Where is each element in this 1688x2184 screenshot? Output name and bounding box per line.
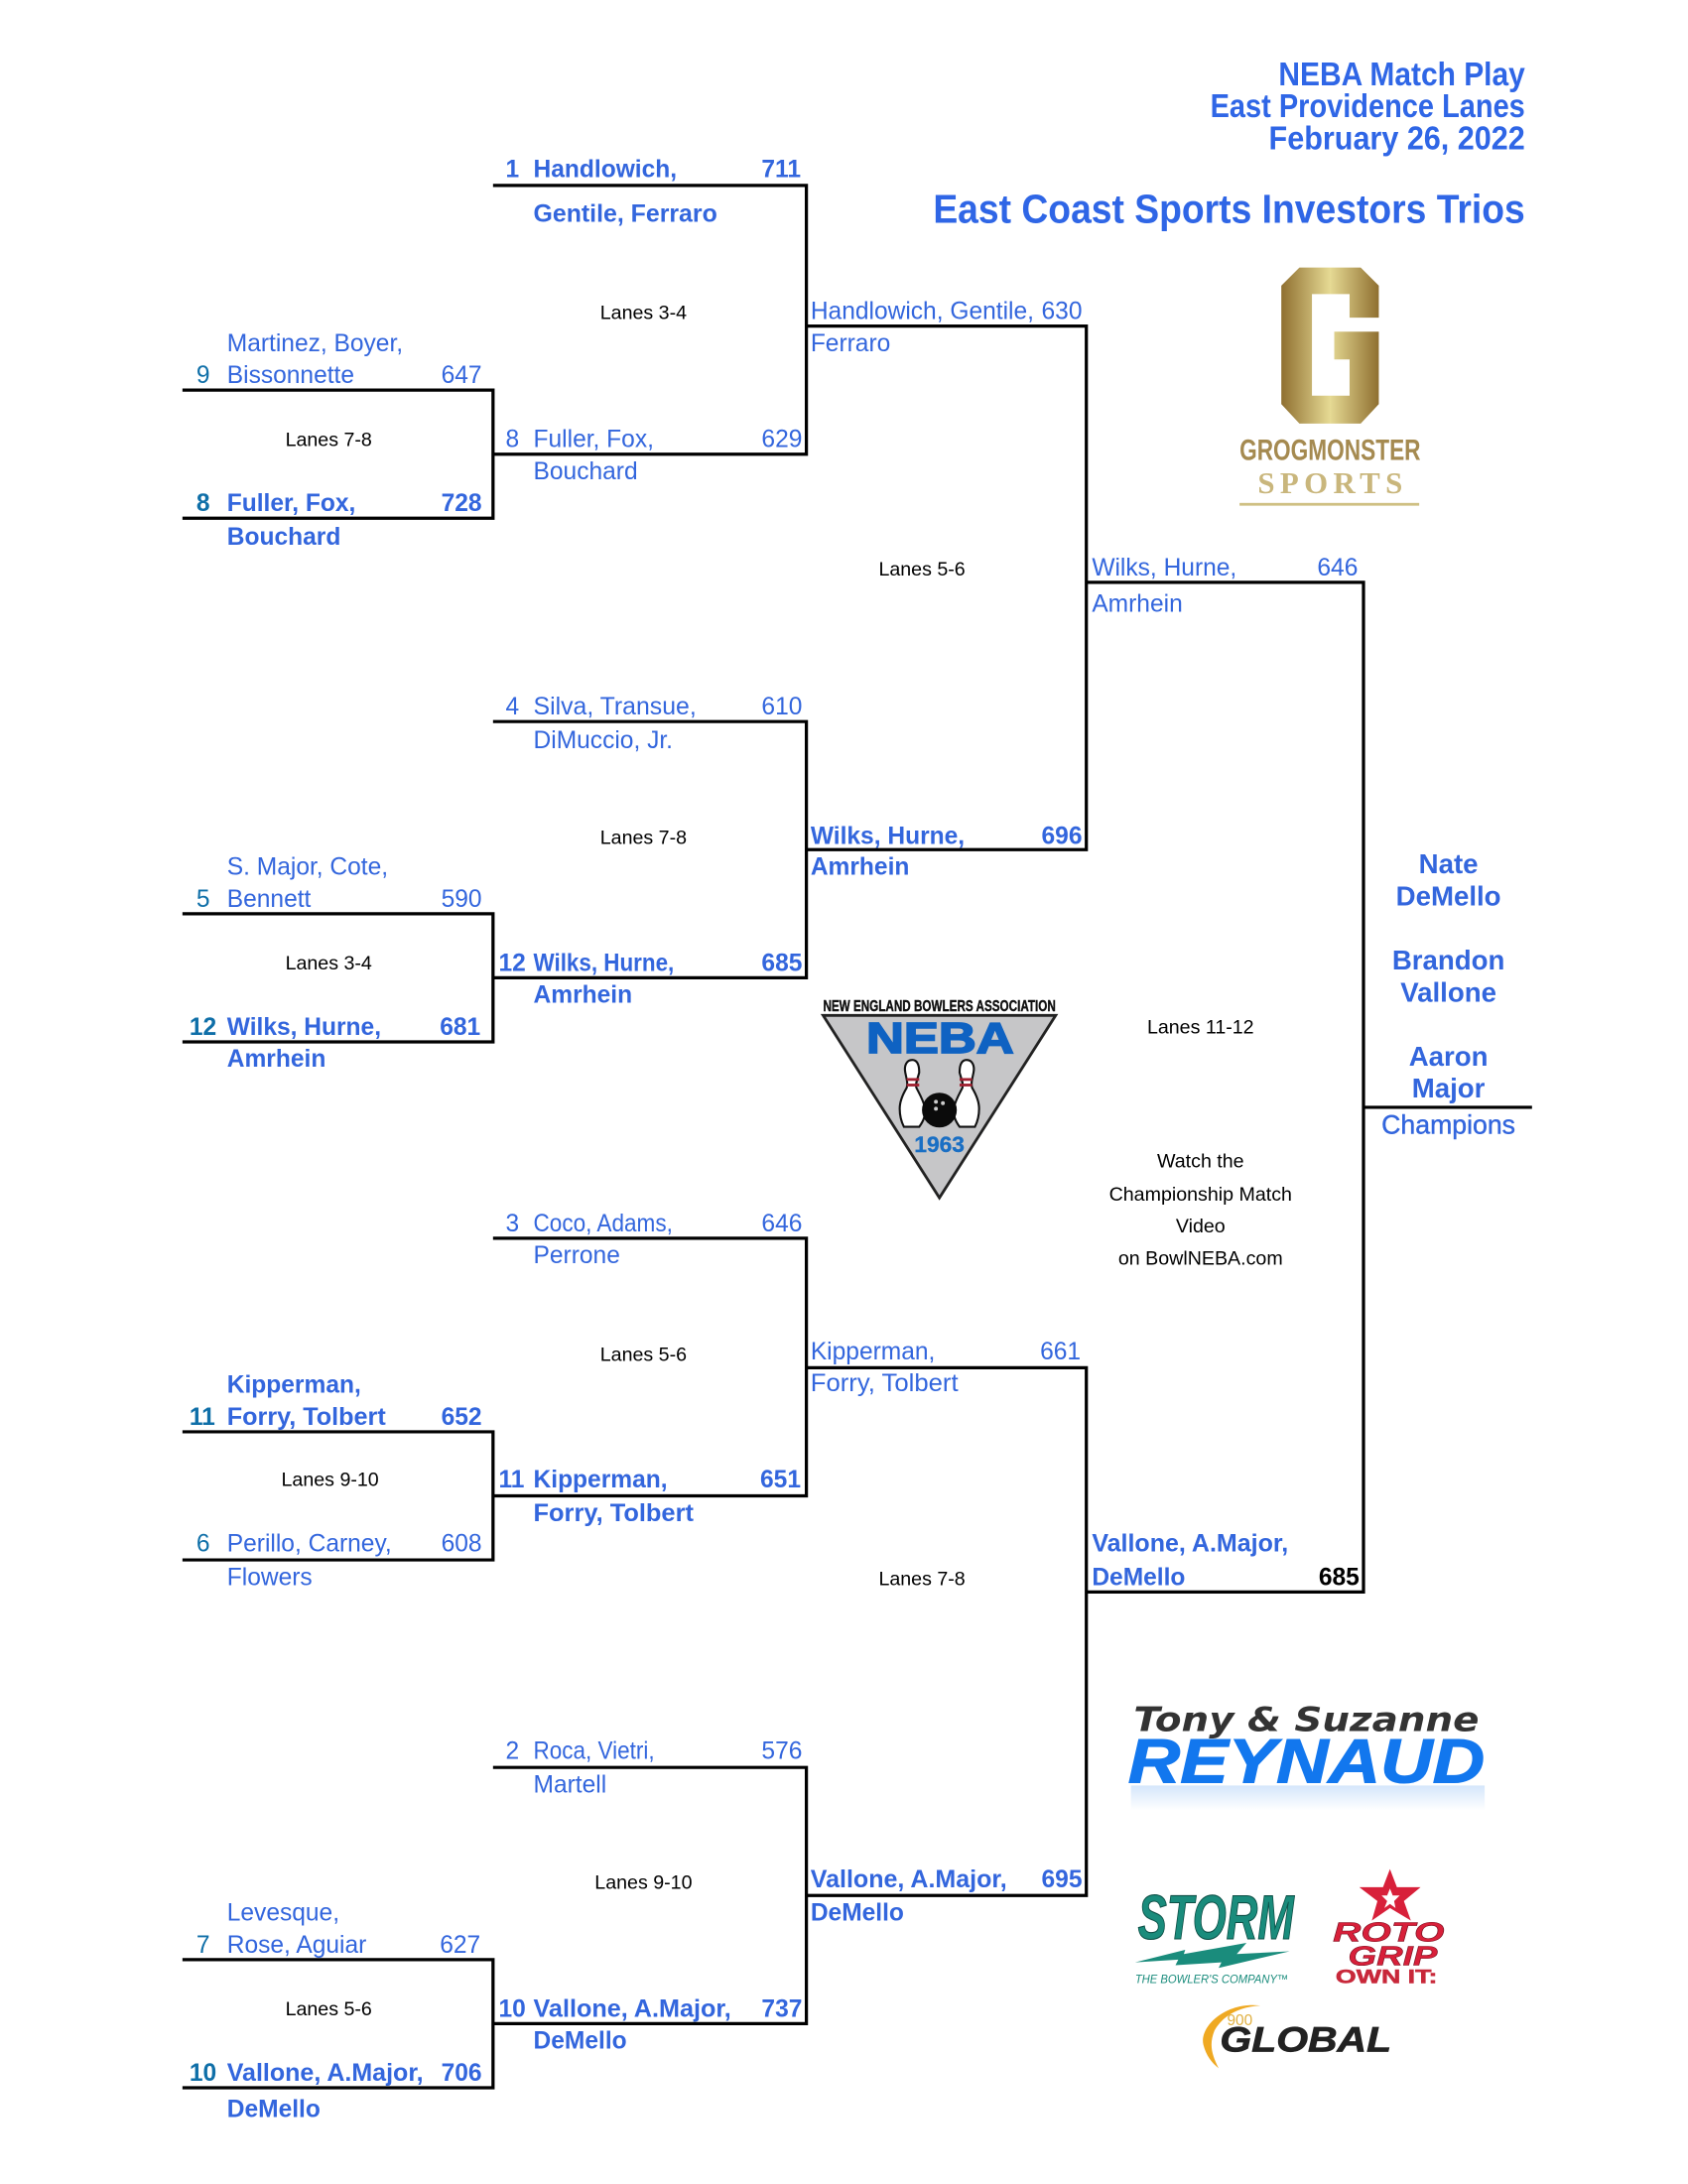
round 2: match 1 vs 8 [505,156,802,485]
note: championship video: on BowlNEBA.com [1118,1248,1283,1270]
round 2: match 2 vs 10: 2 [505,1738,519,1765]
round 2: match 4 vs 12: 4 [505,694,519,720]
logo: Storm: THE BOWLER'S COMPANY™ [1135,1973,1288,1987]
round 2: match 4 vs 12: Wilks, Hurne, [534,950,674,976]
quarterfinal: upper: Handlowich, Gentile, [811,299,1034,325]
champions: Brandon [1392,945,1504,975]
round 2: match 3 vs 11: 3 [505,1211,519,1237]
round 2: match 3 vs 11: 646 [761,1211,802,1237]
logo: Roto Grip [1333,1869,1445,1989]
round 1: match 5 vs 12: Wilks, Hurne, [227,1014,381,1041]
logo: Roto Grip: ROTO [1333,1917,1445,1948]
logo: Tony & Suzanne Reynaud: Tony & Suzanne [1133,1701,1479,1739]
round 2: match 3 vs 11: 11 [498,1467,524,1493]
logo: Storm [1135,1883,1295,1987]
champions: Nate [1419,848,1479,879]
round 2: match 2 vs 10 [498,1738,802,2055]
title: East Coast Sports Investors Trios [933,187,1525,232]
final: Wilks, Hurne, [1092,555,1236,581]
logo: Storm: STORM [1138,1883,1295,1953]
final: 646 [1317,555,1358,581]
round 1: match 5 vs 12: 5 [196,886,210,913]
note: championship video [1109,1150,1292,1270]
logo: Tony & Suzanne Reynaud [1128,1701,1485,1811]
logo: 900 Global: 900 [1227,2012,1252,2029]
logo: Grogmonster Sports [1239,268,1421,506]
quarterfinal: lower: Lanes 7-8 [878,1568,966,1590]
round 1: match 7 vs 10: Rose, Aguiar [227,1932,366,1959]
champions [1381,848,1515,1140]
round 1: match 5 vs 12: 681 [440,1014,480,1041]
round 2: match 4 vs 12: Amrhein [534,982,632,1009]
round 1: match 11 vs 6: 652 [442,1404,482,1431]
logo: NEBA: 1963 [914,1132,965,1157]
round 1: match 9 vs 8: Lanes 7-8 [286,429,372,450]
header: event details: NEBA Match Play [1278,57,1525,93]
header: event details: East Providence Lanes [1211,88,1525,125]
quarterfinal: lower: Forry, Tolbert [811,1370,959,1397]
bracket lines [183,186,1532,2088]
quarterfinal: upper: Amrhein [811,854,909,881]
round 1: match 5 vs 12: 12 [190,1014,216,1041]
round 2: match 1 vs 8: Lanes 3-4 [600,303,687,324]
round 2: match 3 vs 11 [498,1211,802,1527]
round 1: match 11 vs 6: 608 [442,1531,482,1558]
champions: DeMello [1396,880,1501,911]
logo: NEBA: NEBA [866,1015,1014,1063]
round 1: match 7 vs 10: 7 [196,1932,210,1959]
round 2: match 4 vs 12: 12 [498,950,526,976]
quarterfinal: lower: 695 [1042,1866,1082,1893]
logo: Roto Grip: OWN IT: [1336,1967,1437,1989]
logo: 900 Global: GLOBAL [1220,2020,1391,2059]
round 2: match 3 vs 11: Perrone [534,1242,620,1269]
logo: Tony & Suzanne Reynaud: REYNAUD [1128,1728,1485,1797]
round 2: match 2 vs 10: Lanes 9-10 [594,1871,693,1893]
round 1: match 7 vs 10: 627 [440,1932,480,1959]
round 2: match 4 vs 12: 610 [761,694,802,720]
champions: Champions [1381,1110,1515,1140]
round 1: match 9 vs 8 [196,330,482,551]
round 2: match 1 vs 8: 629 [761,427,802,453]
note: championship video: Video [1176,1216,1226,1237]
round 1: match 9 vs 8: Fuller, Fox, [227,490,355,517]
round 1: match 11 vs 6: 6 [196,1531,210,1558]
logo: NEBA [823,998,1056,1198]
logo: NEBA: NEW ENGLAND BOWLERS ASSOCIATION [823,998,1056,1015]
round 2: match 4 vs 12: Lanes 7-8 [600,828,687,849]
round 1: match 11 vs 6: Perillo, Carney, [227,1531,392,1558]
round 1: match 5 vs 12: 590 [442,886,482,913]
logo: Grogmonster Sports: GROGMONSTER [1239,434,1421,466]
round 1: match 5 vs 12: S. Major, Cote, [227,854,388,881]
note: championship video: Championship Match [1109,1184,1292,1206]
quarterfinal: lower: 661 [1040,1339,1081,1365]
final: Amrhein [1092,590,1183,617]
round 1: match 11 vs 6: Lanes 9-10 [282,1470,379,1491]
round 2: match 1 vs 8: 1 [505,156,519,183]
round 2: match 1 vs 8: Bouchard [534,458,638,485]
round 2: match 2 vs 10: 10 [498,1995,526,2022]
quarterfinal: upper: 696 [1042,824,1082,850]
round 1: match 5 vs 12 [190,854,482,1073]
round 1: match 7 vs 10: DeMello [227,2096,321,2122]
logo: Grogmonster Sports: SPORTS [1257,465,1402,500]
quarterfinal: upper [811,299,1082,881]
round 2: match 2 vs 10: 737 [761,1995,802,2022]
final: Lanes 11-12 [1147,1017,1254,1039]
round 1: match 9 vs 8: Bouchard [227,524,340,551]
round 1: match 5 vs 12: Lanes 3-4 [286,953,372,974]
quarterfinal: upper: 630 [1042,299,1082,325]
round 2: match 3 vs 11: 651 [760,1467,801,1493]
round 1: match 5 vs 12: Bennett [227,886,312,913]
champions: Aaron [1409,1041,1489,1072]
round 2: match 2 vs 10: Roca, Vietri, [534,1738,655,1765]
round 1: match 9 vs 8: 9 [196,362,210,389]
quarterfinal: upper: Wilks, Hurne, [811,824,965,850]
final [1092,555,1360,1591]
final: Vallone, A.Major, [1092,1531,1288,1558]
header: event details [1211,57,1525,157]
round 2: match 1 vs 8: Handlowich, [534,156,677,183]
round 1: match 11 vs 6 [190,1372,482,1591]
round 1: match 7 vs 10: 706 [442,2060,482,2087]
round 1: match 9 vs 8: 728 [442,490,482,517]
round 2: match 2 vs 10: Vallone, A.Major, [534,1995,731,2022]
final: DeMello [1092,1564,1185,1591]
round 2: match 1 vs 8: Gentile, Ferraro [534,200,717,227]
note: championship video: Watch the [1157,1150,1244,1172]
logo: Roto Grip: GRIP [1349,1940,1438,1971]
round 1: match 7 vs 10: 10 [190,2060,216,2087]
round 1: match 9 vs 8: 8 [196,490,210,517]
round 2: match 3 vs 11: Lanes 5-6 [600,1344,687,1365]
round 2: match 4 vs 12: Silva, Transue, [534,694,697,720]
quarterfinal: lower: Kipperman, [811,1339,935,1365]
round 2: match 1 vs 8: 711 [761,156,801,183]
quarterfinal: upper: Ferraro [811,330,890,357]
round 2: match 4 vs 12: DiMuccio, Jr. [534,727,673,754]
champions: Vallone [1400,976,1496,1007]
round 1: match 11 vs 6: Forry, Tolbert [227,1404,386,1431]
round 2: match 3 vs 11: Coco, Adams, [534,1211,673,1237]
round 1: match 7 vs 10 [190,1900,482,2122]
round 1: match 9 vs 8: 647 [442,362,482,389]
final: 685 [1319,1564,1360,1591]
round 1: match 7 vs 10: Lanes 5-6 [286,1998,372,2020]
quarterfinal: lower: Vallone, A.Major, [811,1866,1007,1893]
round 2: match 4 vs 12 [498,694,802,1009]
round 2: match 4 vs 12: 685 [761,950,802,976]
round 1: match 11 vs 6: 11 [190,1404,215,1431]
quarterfinal: upper: Lanes 5-6 [878,559,966,580]
round 2: match 2 vs 10: Martell [534,1771,606,1798]
round 1: match 9 vs 8: Martinez, Boyer, [227,330,403,357]
round 1: match 11 vs 6: Kipperman, [227,1372,361,1399]
round 1: match 11 vs 6: Flowers [227,1564,313,1591]
round 2: match 1 vs 8: 8 [505,427,519,453]
round 2: match 2 vs 10: 576 [761,1738,802,1765]
header: event details: February 26, 2022 [1269,120,1525,157]
quarterfinal: lower: DeMello [811,1900,904,1927]
round 1: match 7 vs 10: Levesque, [227,1900,339,1927]
round 2: match 2 vs 10: DeMello [534,2028,627,2055]
round 1: match 7 vs 10: Vallone, A.Major, [227,2060,424,2087]
round 1: match 9 vs 8: Bissonnette [227,362,354,389]
round 2: match 3 vs 11: Forry, Tolbert [534,1500,694,1527]
round 2: match 3 vs 11: Kipperman, [534,1467,668,1493]
quarterfinal: lower [811,1339,1082,1927]
round 1: match 5 vs 12: Amrhein [227,1046,325,1073]
round 2: match 1 vs 8: Fuller, Fox, [534,427,654,453]
champions: Major [1412,1073,1486,1103]
logo: 900 Global [1203,2005,1391,2068]
